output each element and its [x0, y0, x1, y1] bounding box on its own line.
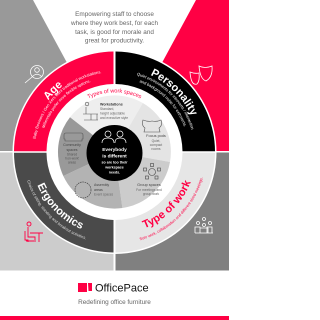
assembly areas label: areas [94, 188, 103, 192]
icon: sofa [64, 133, 83, 141]
assembly areas label: Assembly [94, 183, 109, 187]
community spaces label: Shared [67, 152, 77, 156]
icon: two people [102, 131, 126, 143]
icon: desk [83, 102, 98, 120]
icon: seated worker [25, 222, 43, 242]
workstations label: and executive style [100, 116, 128, 120]
centre circle: needs. [109, 170, 120, 174]
tagline: Redefining office furniture [78, 299, 151, 306]
focus pods label: compact [150, 143, 162, 147]
community spaces label: spaces [66, 148, 78, 152]
bottom bar [0, 316, 229, 320]
intro text: great for productivity. [85, 38, 144, 45]
centre circle: is different [102, 154, 127, 160]
centre circle: workspace [104, 166, 124, 170]
group spaces label: For meetings and [136, 188, 162, 192]
ring label: Age: Millennials prefer more flexible options. [42, 80, 90, 128]
background quadrant: top right [157, 0, 229, 151]
ring label: Type of work: Solo work, collaboration and different sized meetings. [140, 178, 203, 240]
workstations label: Workstations [100, 102, 123, 106]
ring label: Age: Age [44, 82, 62, 100]
icon: pod [142, 120, 162, 132]
ring label: Personality: and background noise for extroverts. [140, 80, 186, 127]
focus pods label: rooms [151, 147, 161, 151]
ring label: Age: Baby Boomers / Gen Xers want traditional workstations. [32, 71, 102, 139]
icon: magnifier person [25, 66, 44, 83]
icon: assembly [75, 182, 91, 198]
icon: theatre masks [190, 66, 212, 84]
pie of work spaces [58, 95, 171, 209]
community spaces label: areas [68, 160, 76, 164]
workstations label: Standard, [100, 107, 114, 111]
ring label: Ergonomics: Choice of sitting, standing and breakout activities. [28, 180, 86, 240]
community spaces label: 'non-work' [65, 156, 80, 160]
background quadrant: bottom left [0, 152, 114, 270]
assembly areas label: Event spaces [94, 192, 114, 196]
outer ring wheel [12, 50, 216, 254]
icon: group table [144, 164, 160, 179]
community spaces label: Community [63, 143, 81, 147]
centre circle: so are too their [102, 160, 128, 164]
background quadrant: top left [0, 0, 72, 151]
group spaces label: group work [143, 192, 160, 196]
centre circle [86, 125, 142, 181]
heading: Types of work spaces: Types of work spaces [86, 88, 142, 98]
logo: OfficePace [95, 282, 149, 294]
workstations label: height adjustable [100, 112, 125, 116]
intro text: task, is good for morale and [75, 29, 154, 36]
focus pods label: Quiet, [152, 139, 160, 143]
intro text: where they work best, for each [70, 20, 158, 27]
ring label: Ergonomics: Ergonomics [38, 182, 83, 228]
group spaces label: Group spaces [137, 183, 161, 187]
ring label: Personality: Personality [151, 68, 197, 114]
focus pods label: Focus pods [146, 134, 166, 138]
ring label: Personality: Quiet environments for introverts / interaction [137, 72, 194, 130]
background quadrant: bottom right [116, 152, 229, 270]
ring label: Type of work: Type of work [142, 180, 191, 228]
icon: meeting group [195, 218, 213, 233]
centre circle: Everybody [102, 147, 127, 153]
intro text: Empowering staff to choose [75, 11, 154, 18]
